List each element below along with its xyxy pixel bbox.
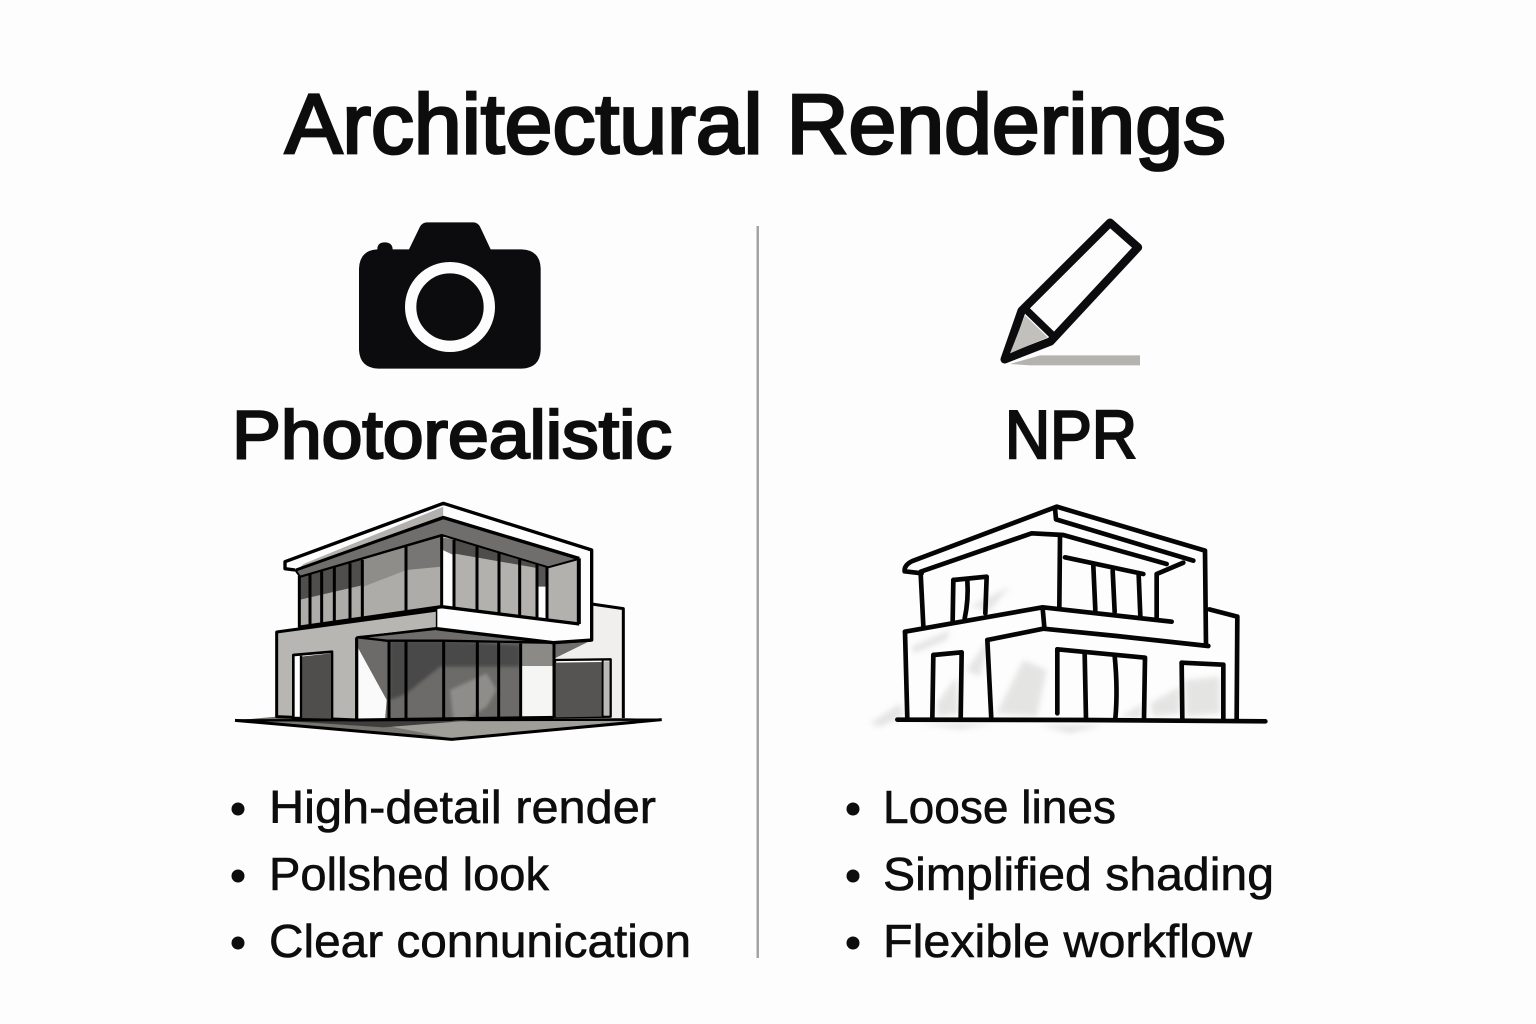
- icon: pencil: [1005, 223, 1140, 365]
- balcony band: [437, 607, 592, 643]
- ground plane: [235, 717, 662, 739]
- bullet item: Clear connunication: Clear connunication: [269, 915, 691, 967]
- heading: Photorealistic: Photorealistic: [232, 397, 672, 473]
- white frame: [579, 550, 592, 640]
- icon: camera: [359, 222, 541, 369]
- bullet list: photorealistic: [232, 781, 691, 967]
- bullet item: High-detail render: High-detail render: [269, 781, 656, 833]
- upper glazing, right face: [442, 535, 578, 624]
- roof slab: [285, 503, 592, 643]
- bullet item: Pollshed look: Pollshed look: [269, 848, 550, 900]
- slab soffit: [357, 629, 591, 643]
- lower glazing: [357, 637, 554, 720]
- bullet list: NPR: [846, 781, 1274, 967]
- left ground floor wall: [277, 610, 437, 720]
- garage door: [555, 659, 611, 717]
- panel: NPR: [846, 223, 1274, 967]
- panel: photorealistic: [232, 222, 691, 967]
- annex wall: [553, 604, 623, 718]
- heading: NPR: NPR: [1005, 397, 1137, 473]
- left band: [299, 607, 579, 627]
- door: left entrance: [293, 652, 332, 719]
- bullet item: Flexible workflow: Flexible workflow: [883, 915, 1253, 967]
- roof soffit: [295, 518, 578, 577]
- upper glazing, left face: [299, 535, 442, 627]
- illustration: NPR sketch house: [870, 507, 1265, 733]
- sketch shading: [870, 587, 1220, 733]
- illustration: photorealistic house: [235, 503, 662, 739]
- bullet item: Loose lines: Loose lines: [883, 781, 1116, 833]
- sketch lines: [897, 507, 1265, 721]
- title: Architectural Renderings: [285, 77, 1226, 171]
- divider between columns: [756, 226, 759, 958]
- bullet item: Simplified shading: Simplified shading: [883, 848, 1274, 900]
